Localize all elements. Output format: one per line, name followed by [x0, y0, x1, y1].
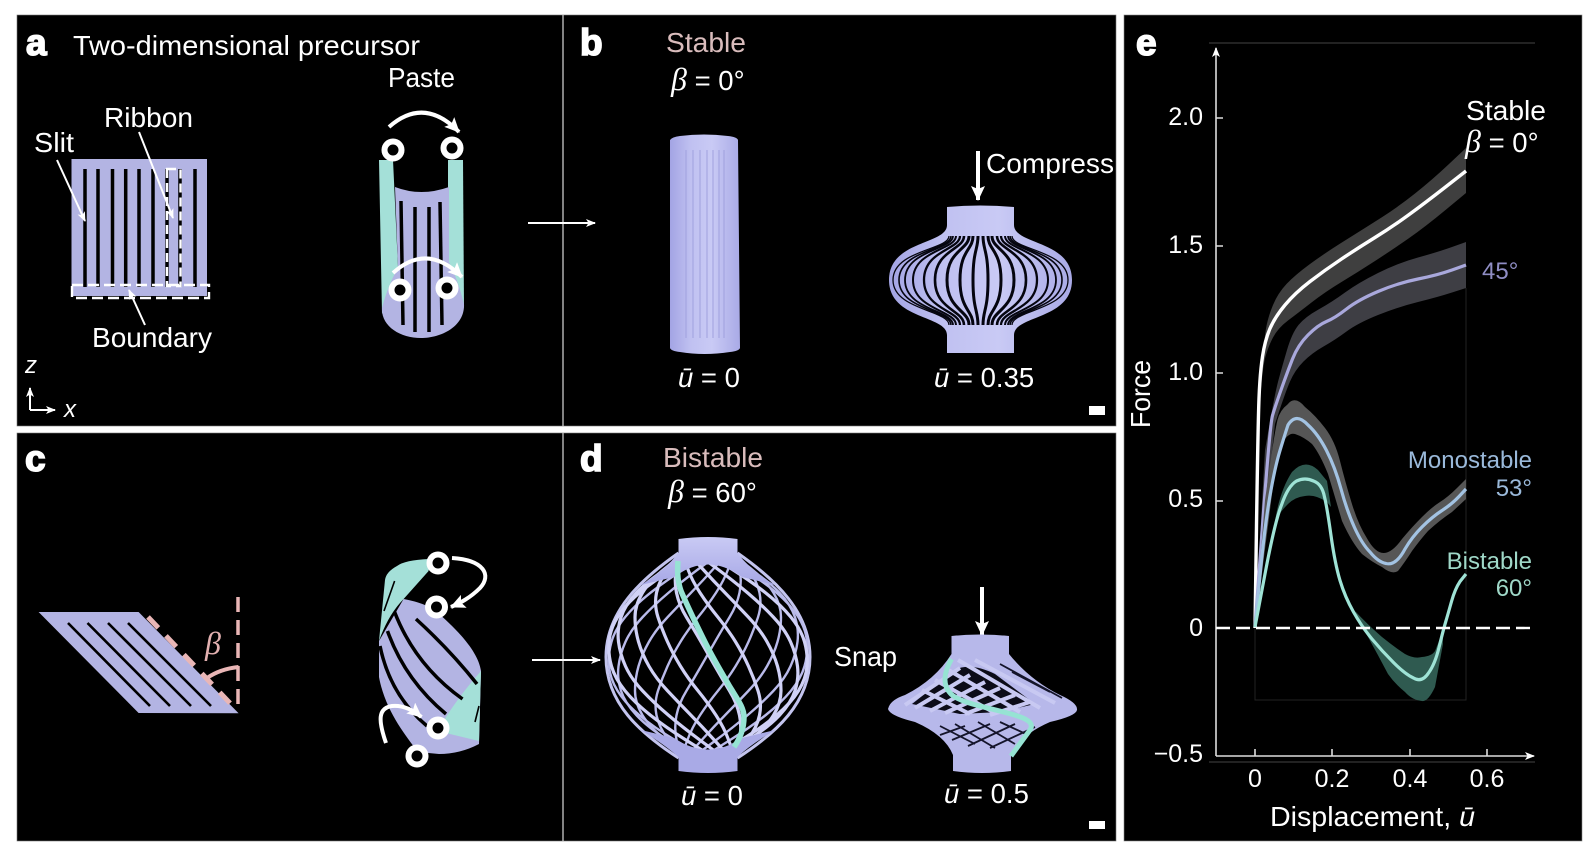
axes: z and x: x [63, 396, 77, 423]
label: bistable: Bistable [1447, 548, 1532, 575]
panel letter a: a [26, 22, 47, 63]
arrow: a to b [528, 222, 595, 224]
panel: b stable [580, 22, 1114, 415]
y tick labels: 1.5 [1168, 231, 1203, 259]
arrow: ribbon pointer [139, 132, 173, 218]
lattice globe at u=0 [606, 537, 810, 773]
label: monostable: Monostable [1408, 447, 1532, 474]
flat precursor sheet with slits [72, 159, 209, 298]
heading: stable: Stable [666, 27, 746, 58]
panels c and d background [17, 433, 1116, 841]
panel divider top [562, 15, 564, 426]
twisted cylinder with pasted edges [379, 554, 485, 764]
arrow: boundary pointer [129, 290, 145, 325]
label: compress: Compress [986, 148, 1114, 179]
label: u=0: ū = 0 [678, 362, 740, 393]
x tick labels: 0.6 [1470, 765, 1504, 793]
curve: monostable 53 degrees [1255, 400, 1466, 627]
x tick labels: 0.2 [1315, 765, 1349, 793]
arrow: c to d [532, 659, 600, 661]
x tick labels: 0 [1248, 765, 1262, 793]
label: u=0: ū = 0 [681, 780, 743, 811]
label: snap: Snap [834, 641, 897, 672]
panel letter c: c [25, 438, 46, 479]
y tick labels: 0 [1189, 614, 1203, 642]
scale bar [1089, 406, 1105, 415]
y tick labels: 0.5 [1168, 485, 1203, 513]
panel: c sheared precursor [25, 438, 485, 764]
zero dashed line [1216, 627, 1530, 629]
arrow: slit pointer [57, 160, 85, 221]
arrow: compress d [980, 587, 984, 635]
rolled cylinder with pasted edges [379, 113, 464, 338]
label: beta 60: β = 60° [667, 473, 757, 509]
heading: two-dimensional precursor: Two-dimensional precursor [73, 30, 420, 61]
x tick labels [1248, 765, 1504, 793]
panel letter b: b [580, 22, 603, 63]
label: u=0.35: ū = 0.35 [934, 362, 1034, 393]
curve: 45 degrees [1255, 242, 1466, 628]
y tick labels: −0.5 [1154, 740, 1203, 768]
panel: d bistable [580, 438, 1105, 829]
axes [1216, 48, 1534, 756]
y tick labels [1154, 103, 1203, 768]
cylinder at u=0 [670, 134, 740, 354]
panel letter e: e [1136, 22, 1157, 63]
panel: e force displacement chart [1125, 22, 1546, 832]
label: stable: Stable [1466, 95, 1546, 126]
label: boundary: Boundary [92, 322, 212, 353]
panel: a two-dimensional precursor [24, 22, 464, 423]
angle beta annotation [148, 597, 238, 712]
label: u=0.5: ū = 0.5 [944, 778, 1029, 809]
curve: stable 0 degrees [1255, 148, 1466, 628]
chart frame lines [1209, 43, 1535, 762]
y tick labels: 1.0 [1168, 358, 1203, 386]
label: 60 degrees: 60° [1496, 575, 1532, 602]
y tick labels: 2.0 [1168, 103, 1203, 131]
x axis title: Displacement, ū [1270, 801, 1475, 832]
scale bar [1089, 821, 1105, 829]
label: slit: Slit [34, 127, 74, 158]
panels a and b background [17, 15, 1116, 426]
panel letter d: d [580, 438, 603, 479]
panel divider bottom [562, 433, 564, 841]
angle beta annotation: β [204, 625, 221, 661]
label: 53 degrees: 53° [1496, 475, 1532, 502]
axes: z and x: z [24, 352, 37, 379]
heading: bistable: Bistable [663, 442, 763, 473]
label: paste: Paste [388, 62, 455, 93]
label: beta 0: β = 0° [1464, 123, 1539, 159]
snapped lattice at u=0.5 [888, 634, 1077, 773]
axes: z and x [24, 352, 77, 423]
sheared sheet with slits [39, 612, 239, 713]
arrow: compress [976, 151, 980, 200]
buckled cylinder at u=0.35 [889, 206, 1072, 353]
x tick labels: 0.4 [1393, 765, 1427, 793]
label: ribbon: Ribbon [104, 102, 193, 133]
label: beta 0: β = 0° [670, 61, 745, 97]
panel e background [1124, 15, 1582, 841]
curve: bistable 60 degrees [1255, 464, 1466, 701]
label: 45 degrees: 45° [1482, 258, 1518, 285]
y axis title: Force [1125, 360, 1156, 428]
